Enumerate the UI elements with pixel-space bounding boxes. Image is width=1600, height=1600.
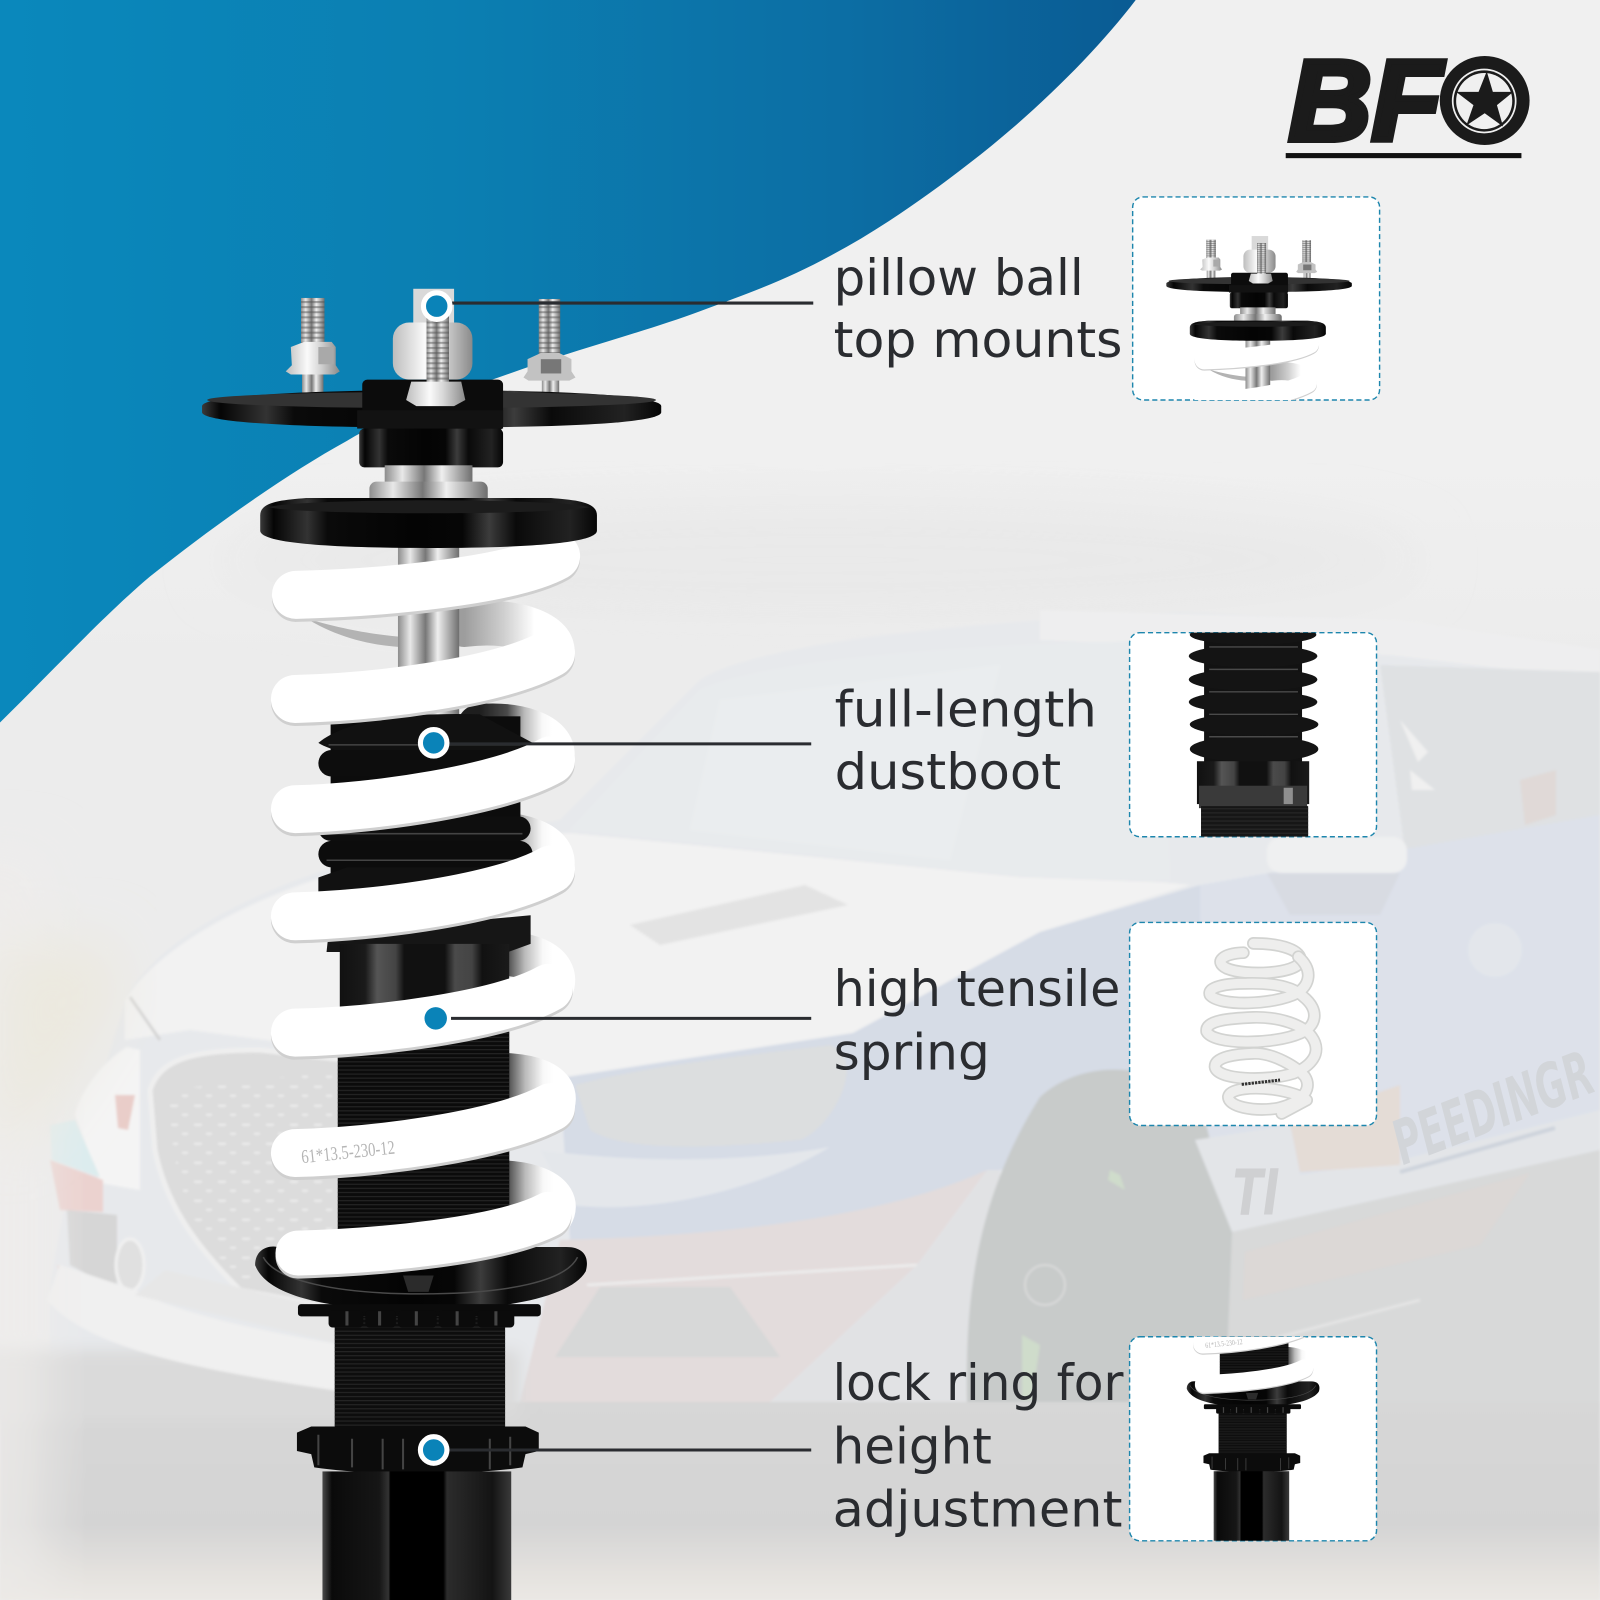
upper lock ring: [298, 1304, 541, 1328]
label: full-length dustboot: full-length: [835, 681, 1097, 739]
spring seat: [255, 1247, 587, 1310]
callout: spring leader: [424, 1007, 811, 1030]
thumbnail 3 content: loose white spring: [1207, 943, 1316, 1113]
callout: dustboot leader: [420, 730, 811, 756]
spring front coils: [295, 556, 556, 1253]
spring back sections: [464, 623, 553, 1214]
label: lock ring for height adjustment: adjustment: [833, 1481, 1122, 1539]
coilover product: [202, 289, 661, 1600]
back shadow under first coil: [306, 618, 400, 647]
callout: lock ring leader: [420, 1437, 811, 1463]
label: lock ring for height adjustment: [833, 1354, 1124, 1539]
label: lock ring for height adjustment: lock ring for: [833, 1354, 1124, 1412]
blue swoosh: [0, 0, 1136, 722]
top mount: [202, 289, 661, 548]
label: pillow ball top mounts: pillow ball: [834, 249, 1084, 307]
logo: BFO: [1286, 38, 1530, 165]
piston shaft: [398, 541, 459, 724]
seat notch: [403, 1276, 434, 1292]
damper threads: [338, 1031, 509, 1235]
spring under-edge shading: [295, 559, 556, 1256]
thumbnail 4 content: lock ring close-up: [1186, 1336, 1320, 1541]
label: high tensile spring: spring: [834, 1023, 990, 1081]
thumbnail 1 content: top mount close-up: [1166, 236, 1352, 400]
callout: pillow ball leader: [423, 293, 813, 319]
label: full-length dustboot: dustboot: [835, 743, 1061, 801]
label: pillow ball top mounts: top mounts: [834, 311, 1122, 369]
label: pillow ball top mounts: [834, 249, 1122, 369]
spring stamp: 61*13.5-230-12: [300, 1138, 396, 1168]
damper collar: [327, 915, 531, 952]
logo: BFO: BF: [1289, 38, 1445, 165]
thumbnail 4 frame: lock ring: [1130, 1337, 1377, 1541]
label: high tensile spring: [834, 960, 1120, 1081]
label: lock ring for height adjustment: height: [833, 1417, 992, 1475]
label: high tensile spring: high tensile: [834, 960, 1120, 1018]
faded car livery lettering: TI: [1233, 1155, 1280, 1229]
label: full-length dustboot: [835, 681, 1097, 801]
lower threaded body: [335, 1316, 505, 1434]
faded race car photo: [0, 500, 1600, 1600]
thumbnail 2 content: bellows: [1189, 624, 1318, 837]
lower lock ring: [297, 1427, 539, 1473]
thumbnail 1 frame: pillow ball top mounts: [1133, 197, 1380, 400]
faded car livery lettering: [1233, 1038, 1600, 1229]
damper body: [340, 944, 509, 1240]
lower tube: [322, 1471, 511, 1600]
thumbnail 3 frame: spring: [1130, 922, 1377, 1126]
dust boot: [318, 714, 533, 900]
thumbnail 2 frame: dustboot: [1130, 633, 1377, 837]
